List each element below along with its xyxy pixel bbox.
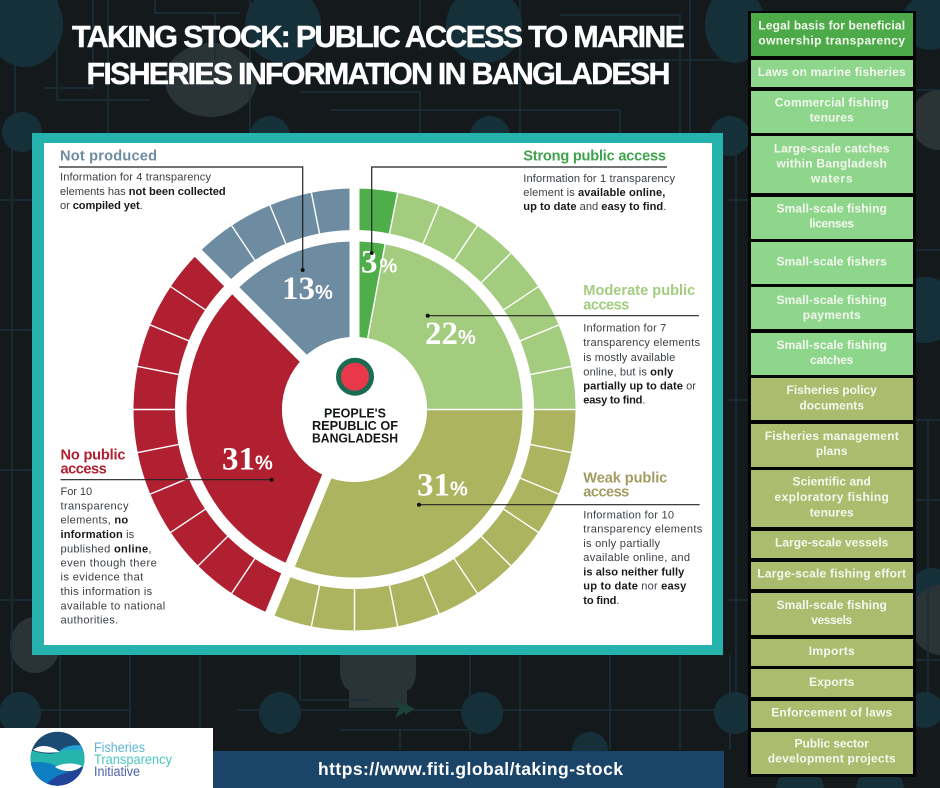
item: small-scale fishing licenses: Small-scale fishing — [777, 202, 887, 216]
item: small-scale fishers: Small-scale fishers — [777, 255, 887, 269]
item: enforcement of laws — [751, 701, 913, 728]
callout: no public access: No public — [60, 447, 126, 463]
item: public sector development projects — [751, 732, 913, 774]
callout: moderate public access: transparency elements — [583, 337, 700, 349]
outer ring: transparency elements — [71, 126, 638, 693]
item: laws on marine fisheries: Laws on marine fisheries — [758, 65, 906, 79]
callout: moderate public access: online, but is only — [583, 366, 674, 378]
title — [72, 20, 685, 91]
icon: Bangladesh flag roundel — [336, 358, 374, 396]
callout: moderate public access: easy to find. — [583, 394, 645, 406]
URL bar — [213, 751, 724, 788]
callout: moderate public access: is mostly available — [583, 352, 675, 364]
item: fisheries policy documents: Fisheries policy — [787, 383, 877, 397]
logo: Fisheries Transparency Initiative: Fisheries — [94, 740, 145, 755]
country label: BANGLADESH — [312, 432, 398, 446]
item: small-scale fishing licenses — [751, 197, 913, 239]
callout: strong public access: element is available online, — [523, 187, 665, 199]
value: 3%: 3% — [361, 245, 398, 281]
callout: weak public access: access — [583, 485, 629, 501]
callout: weak public access: transparency elements — [583, 524, 703, 536]
callout: no public access: this information is — [60, 586, 153, 598]
item: imports: Imports — [809, 644, 855, 658]
title: FISHERIES INFORMATION IN BANGLADESH — [86, 57, 670, 91]
item: large-scale fishing effort: Large-scale fishing effort — [757, 567, 906, 581]
callout: strong public access: up to date and easy to find. — [523, 201, 666, 213]
callout: no public access: For 10 — [60, 486, 92, 498]
item: public sector development projects: development projects — [768, 752, 896, 766]
country label — [312, 406, 398, 446]
callout: moderate public access: Moderate public — [583, 283, 695, 299]
callout: no public access: elements, no — [60, 515, 128, 527]
item: large-scale catches: Large-scale catches — [774, 141, 890, 155]
logo: Fisheries Transparency Initiative: Initiative — [94, 764, 140, 779]
item: large-scale catches: within Bangladesh — [776, 157, 887, 171]
value: 31% weak access: 31% — [417, 468, 468, 504]
item: fisheries policy documents — [751, 378, 913, 420]
item: legal basis — [751, 13, 913, 56]
item: large-scale catches: waters — [810, 172, 853, 186]
item: scientific and exploratory fishing tenures: exploratory fishing — [775, 490, 889, 504]
logo: Fisheries Transparency Initiative — [0, 728, 213, 788]
URL bar: https://www.fiti.global/taking-stock — [318, 759, 623, 779]
title: TAKING STOCK: PUBLIC ACCESS TO MARINE — [72, 20, 685, 54]
callout: weak public access — [417, 470, 703, 607]
callout: weak public access: Weak public — [583, 470, 667, 486]
item: small-scale fishing vessels: vessels — [811, 613, 853, 627]
callout: no public access: is evidence that — [60, 572, 143, 584]
callout: moderate public access: Information for 7 — [583, 323, 666, 335]
panel: teal framed chart panel — [32, 133, 723, 655]
callout: not produced — [59, 149, 305, 272]
callout: no public access — [60, 447, 274, 627]
item: exports: Exports — [809, 675, 855, 689]
item: small-scale fishing catches: catches — [810, 353, 854, 367]
item: large-scale catches — [751, 136, 913, 193]
donut chart — [71, 126, 638, 693]
callout: strong public access: Strong public access — [523, 149, 666, 165]
callout: moderate public access — [426, 283, 700, 406]
item: legal basis: Legal basis for beneficial — [758, 19, 905, 33]
value: 22%: 22% — [425, 316, 476, 352]
item: legal basis: ownership transparency — [758, 34, 905, 48]
item: large-scale vessels: Large-scale vessels — [775, 536, 889, 550]
item: imports — [751, 639, 913, 666]
item: commercial fishing tenures: tenures — [810, 111, 854, 125]
callout: no public access: information is — [60, 529, 135, 541]
callout: no public access: authorities. — [60, 615, 118, 627]
item: small-scale fishing vessels — [751, 593, 913, 635]
callout: not produced: Information for 4 transparency — [60, 172, 211, 184]
item: fisheries management plans: plans — [816, 444, 848, 458]
inner ring: percentage shares — [184, 239, 525, 580]
item: small-scale fishing licenses: licenses — [809, 217, 854, 231]
panel: transparency elements sidebar — [748, 11, 916, 777]
country label: REPUBLIC OF — [312, 419, 398, 433]
value: 13%: 13% — [282, 271, 333, 307]
item: commercial fishing tenures: Commercial fishing — [775, 96, 889, 110]
item: fisheries management plans — [751, 424, 913, 467]
callout: not produced: elements has not been collected — [60, 186, 226, 198]
callout: no public access: available to national — [60, 600, 165, 612]
item: exports — [751, 669, 913, 697]
callout: strong public access: Information for 1 transparency — [523, 173, 675, 185]
item: small-scale fishing payments — [751, 287, 913, 329]
item: scientific and exploratory fishing tenures — [751, 470, 913, 527]
item: fisheries policy documents: documents — [799, 398, 864, 412]
country label: PEOPLE'S — [324, 406, 386, 420]
callout: strong public access — [370, 149, 675, 255]
callout: not produced: Not produced — [60, 149, 157, 165]
item: scientific and exploratory fishing tenures: tenures — [810, 506, 854, 520]
item: small-scale fishing catches: Small-scale fishing — [777, 338, 887, 352]
callout: weak public access: available online, and — [583, 552, 690, 564]
item: small-scale fishing payments: payments — [803, 308, 861, 322]
callout: weak public access: up to date nor easy — [583, 580, 687, 592]
item: small-scale fishing payments: Small-scale fishing — [777, 293, 887, 307]
value: 31% no access: 31% — [222, 441, 273, 477]
item: small-scale fishing catches — [751, 333, 913, 375]
callout: not produced: or compiled yet. — [60, 200, 143, 212]
item: scientific and exploratory fishing tenures: Scientific and — [793, 475, 871, 489]
callout: weak public access: to find. — [583, 595, 619, 607]
item: enforcement of laws: Enforcement of laws — [771, 706, 893, 720]
item: commercial fishing tenures — [751, 91, 913, 133]
item: laws on marine fisheries — [751, 60, 913, 87]
callout: weak public access: is only partially — [583, 538, 660, 550]
item: fisheries management plans: Fisheries management — [765, 429, 899, 443]
item: public sector development projects: Public sector — [795, 737, 869, 751]
logo: Fisheries Transparency Initiative: Transparency — [94, 752, 172, 767]
item: small-scale fishing vessels: Small-scale fishing — [777, 598, 887, 612]
callout: no public access: transparency — [60, 500, 129, 512]
callout: moderate public access: access — [583, 297, 629, 313]
callout: no public access: published online, — [60, 543, 152, 555]
callout: weak public access: is also neither fully — [583, 566, 685, 578]
callout: no public access: even though there — [60, 558, 157, 570]
item: large-scale vessels — [751, 531, 913, 558]
item: small-scale fishers — [751, 242, 913, 284]
item: large-scale fishing effort — [751, 562, 913, 589]
callout: no public access: access — [60, 462, 107, 478]
callout: weak public access: Information for 10 — [583, 509, 674, 521]
callout: moderate public access: partially up to date or — [583, 381, 696, 393]
